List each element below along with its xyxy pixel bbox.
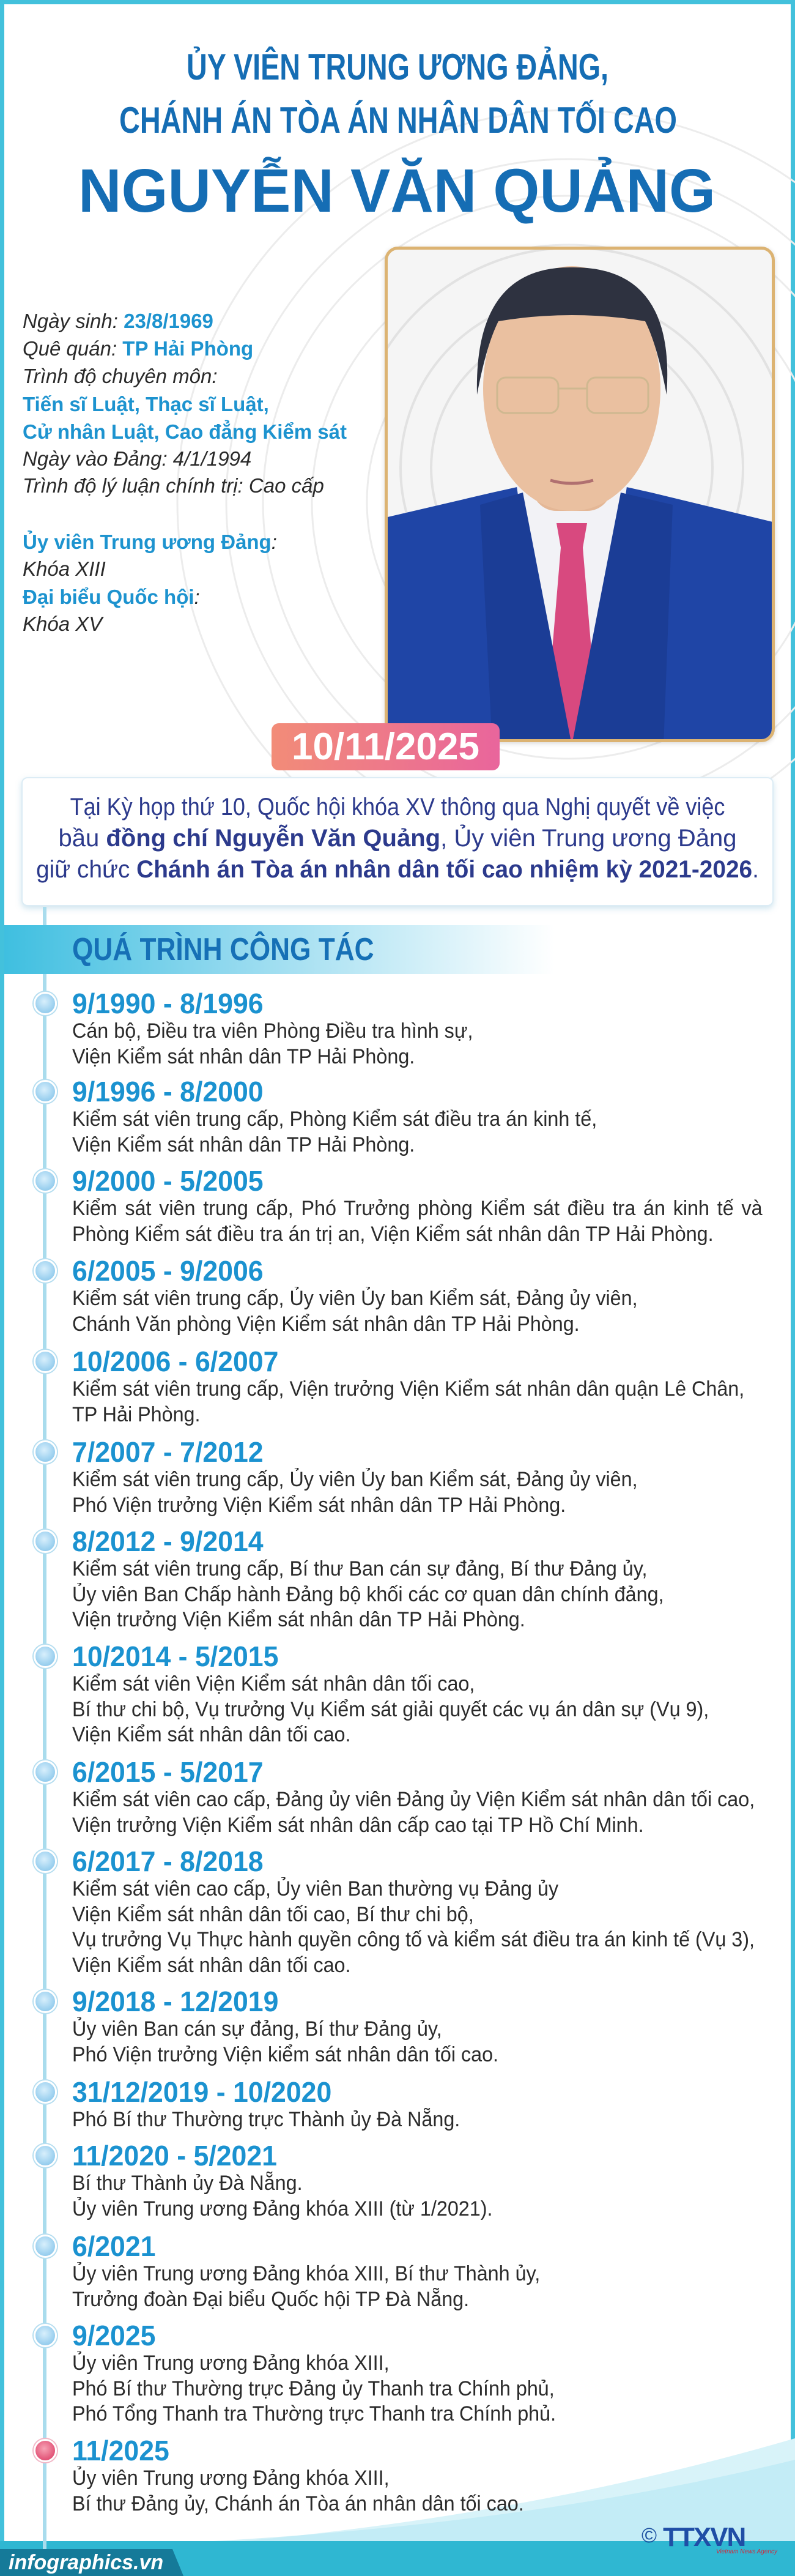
entry 6/2015	[32, 1756, 755, 1837]
entry 9/1990: Viện Kiểm sát nhân dân TP Hải Phòng.	[72, 1045, 415, 1068]
logo: TTXVN: Vietnam News Agency	[716, 2548, 777, 2555]
entry 6/2017: Viện Kiểm sát nhân dân tối cao.	[72, 1953, 351, 1976]
footer website tab: infographics.vn	[9, 2551, 163, 2574]
entry 9/2000: Phòng Kiểm sát điều tra án trị an, Viện Kiểm sát nhân dân TP Hải Phòng.	[72, 1223, 714, 1246]
background drum pattern	[176, 109, 795, 778]
entry 11/2025	[32, 2435, 524, 2515]
entry 11/2025: Bí thư Đảng ủy, Chánh án Tòa án nhân dân tối cao.	[72, 2492, 524, 2515]
entry 9/2025	[32, 2320, 556, 2425]
entry 10/2014	[32, 1640, 709, 1746]
entry 6/2015: Viện trưởng Viện Kiểm sát nhân dân cấp cao tại TP Hồ Chí Minh.	[72, 1814, 644, 1837]
entry 9/2025: Phó Tổng Thanh tra Thường trực Thanh tra Chính phủ.	[72, 2402, 556, 2425]
entry 6/2015: Kiểm sát viên cao cấp, Đảng ủy viên Đảng ủy Viện Kiểm sát nhân dân tối cao,	[72, 1788, 755, 1811]
personal info: Khóa XV	[23, 612, 102, 635]
personal info: Đại biểu Quốc hội:	[23, 586, 200, 608]
entry 9/2000: 9/2000 - 5/2005	[72, 1165, 264, 1197]
entry 6/2017: Vụ trưởng Vụ Thực hành quyền công tố và kiểm sát điều tra án kinh tế (Vụ 3),	[72, 1928, 755, 1951]
entry 9/2025: Ủy viên Trung ương Đảng khóa XIII,	[72, 2351, 390, 2375]
entry 31/12/2019: Phó Bí thư Thường trực Thành ủy Đà Nẵng.	[72, 2108, 460, 2131]
entry 11/2020: 11/2020 - 5/2021	[72, 2140, 277, 2172]
entry 9/2000	[32, 1165, 763, 1246]
title	[78, 47, 716, 225]
summary box: giữ chức Chánh án Tòa án nhân dân tối cao nhiệm kỳ 2021-2026.	[36, 856, 759, 883]
entry 10/2014: Bí thư chi bộ, Vụ trưởng Vụ Kiểm sát giải quyết các vụ án dân sự (Vụ 9),	[72, 1697, 709, 1721]
entry 9/1996	[32, 1076, 597, 1156]
entry 9/1996: Viện Kiểm sát nhân dân TP Hải Phòng.	[72, 1133, 415, 1156]
entry 9/1996: 9/1996 - 8/2000	[72, 1076, 264, 1107]
entry 8/2012: Kiểm sát viên trung cấp, Bí thư Ban cán sự đảng, Bí thư Đảng ủy,	[72, 1557, 647, 1580]
entry 9/2018: Ủy viên Ban cán sự đảng, Bí thư Đảng ủy,	[72, 2017, 442, 2041]
entry 11/2020	[32, 2140, 492, 2220]
entry 6/2005: Kiểm sát viên trung cấp, Ủy viên Ủy ban Kiểm sát, Đảng ủy viên,	[72, 1287, 638, 1310]
entry 9/2018	[32, 1986, 498, 2066]
entry 11/2025: Ủy viên Trung ương Đảng khóa XIII,	[72, 2466, 390, 2490]
entry 8/2012: Viện trưởng Viện Kiểm sát nhân dân TP Hải Phòng.	[72, 1608, 525, 1631]
entry 6/2005: 6/2005 - 9/2006	[72, 1255, 264, 1287]
personal info: Ngày sinh: 23/8/1969	[23, 310, 213, 332]
entry 8/2012	[32, 1525, 664, 1631]
summary box: bầu đồng chí Nguyễn Văn Quảng, Ủy viên Trung ương Đảng	[59, 825, 736, 852]
entry 9/2018: Phó Viện trưởng Viện kiểm sát nhân dân tối cao.	[72, 2042, 498, 2066]
summary box: Tại Kỳ họp thứ 10, Quốc hội khóa XV thông qua Nghị quyết về việc	[70, 794, 725, 821]
date badge: 10/11/2025	[292, 726, 479, 768]
entry 9/2025: 9/2025	[72, 2320, 155, 2351]
entry 31/12/2019	[32, 2076, 460, 2131]
entry 6/2021: Ủy viên Trung ương Đảng khóa XIII, Bí thư Thành ủy,	[72, 2262, 540, 2285]
portrait photo	[385, 247, 775, 742]
title: NGUYỄN VĂN QUẢNG	[78, 156, 716, 225]
entry 8/2012: Ủy viên Ban Chấp hành Đảng bộ khối các cơ quan dân chính đảng,	[72, 1582, 664, 1606]
entry 6/2017: Viện Kiểm sát nhân dân tối cao, Bí thư chi bộ,	[72, 1903, 474, 1926]
personal info: Trình độ lý luận chính trị: Cao cấp	[23, 474, 324, 497]
section heading: QUÁ TRÌNH CÔNG TÁC	[72, 932, 374, 967]
personal info: Cử nhân Luật, Cao đẳng Kiểm sát	[23, 420, 347, 443]
entry 10/2014: Viện Kiểm sát nhân dân tối cao.	[72, 1723, 351, 1746]
personal info: Trình độ chuyên môn:	[23, 365, 218, 387]
entry 9/1990: Cán bộ, Điều tra viên Phòng Điều tra hình sự,	[72, 1019, 473, 1043]
entry 10/2006: TP Hải Phòng.	[72, 1402, 200, 1426]
timeline entries	[32, 988, 763, 2515]
logo: TTXVN	[642, 2522, 778, 2555]
entry 6/2021: 6/2021	[72, 2230, 155, 2262]
entry 9/2025: Phó Bí thư Thường trực Đảng ủy Thanh tra Chính phủ,	[72, 2377, 555, 2400]
title: ỦY VIÊN TRUNG ƯƠNG ĐẢNG,	[187, 47, 608, 87]
entry 10/2006	[32, 1346, 744, 1426]
entry 11/2020: Bí thư Thành ủy Đà Nẵng.	[72, 2172, 303, 2195]
entry 7/2007: Phó Viện trưởng Viện Kiểm sát nhân dân TP Hải Phòng.	[72, 1493, 566, 1516]
personal info: Ngày vào Đảng: 4/1/1994	[23, 447, 251, 470]
footer wave	[0, 2438, 795, 2576]
entry 6/2021: Trưởng đoàn Đại biểu Quốc hội TP Đà Nẵng.	[72, 2287, 469, 2310]
entry 10/2014: 10/2014 - 5/2015	[72, 1640, 278, 1672]
entry 6/2005	[32, 1255, 638, 1335]
personal info: Tiến sĩ Luật, Thạc sĩ Luật,	[23, 393, 269, 415]
personal info: Khóa XIII	[23, 557, 106, 580]
logo: TTXVN: ©TTXVN	[642, 2522, 745, 2552]
personal info: Ủy viên Trung ương Đảng:	[23, 530, 277, 553]
entry 7/2007: 7/2007 - 7/2012	[72, 1436, 264, 1468]
entry 10/2006: Kiểm sát viên trung cấp, Viện trưởng Viện Kiểm sát nhân dân quận Lê Chân,	[72, 1377, 744, 1401]
entry 10/2014: Kiểm sát viên Viện Kiểm sát nhân dân tối cao,	[72, 1672, 475, 1696]
entry 9/1996: Kiểm sát viên trung cấp, Phòng Kiểm sát điều tra án kinh tế,	[72, 1107, 597, 1131]
entry 9/2018: 9/2018 - 12/2019	[72, 1986, 278, 2017]
entry 6/2005: Chánh Văn phòng Viện Kiểm sát nhân dân TP Hải Phòng.	[72, 1312, 580, 1335]
entry 9/1990: 9/1990 - 8/1996	[72, 988, 264, 1019]
entry 6/2017: Kiểm sát viên cao cấp, Ủy viên Ban thường vụ Đảng ủy	[72, 1877, 558, 1900]
entry 6/2015: 6/2015 - 5/2017	[72, 1756, 264, 1788]
section heading	[4, 925, 555, 974]
entry 6/2021	[32, 2230, 540, 2310]
entry 7/2007: Kiểm sát viên trung cấp, Ủy viên Ủy ban Kiểm sát, Đảng ủy viên,	[72, 1468, 638, 1491]
timeline line	[43, 907, 46, 2553]
entry 11/2025: 11/2025	[72, 2435, 169, 2466]
personal info	[23, 310, 347, 635]
personal info: Quê quán: TP Hải Phòng	[23, 337, 253, 360]
entry 11/2020: Ủy viên Trung ương Đảng khóa XIII (từ 1/2021).	[72, 2197, 492, 2220]
entry 9/2000: Kiểm sát viên trung cấp, Phó Trưởng phòng Kiểm sát điều tra án kinh tế và	[72, 1197, 763, 1220]
entry 6/2017: 6/2017 - 8/2018	[72, 1845, 264, 1877]
entry 31/12/2019: 31/12/2019 - 10/2020	[72, 2076, 331, 2108]
entry 9/1990	[32, 988, 473, 1068]
entry 8/2012: 8/2012 - 9/2014	[72, 1525, 264, 1557]
entry 6/2017	[32, 1845, 755, 1976]
entry 7/2007	[32, 1436, 638, 1516]
summary box	[21, 777, 774, 906]
entry 10/2006: 10/2006 - 6/2007	[72, 1346, 278, 1377]
